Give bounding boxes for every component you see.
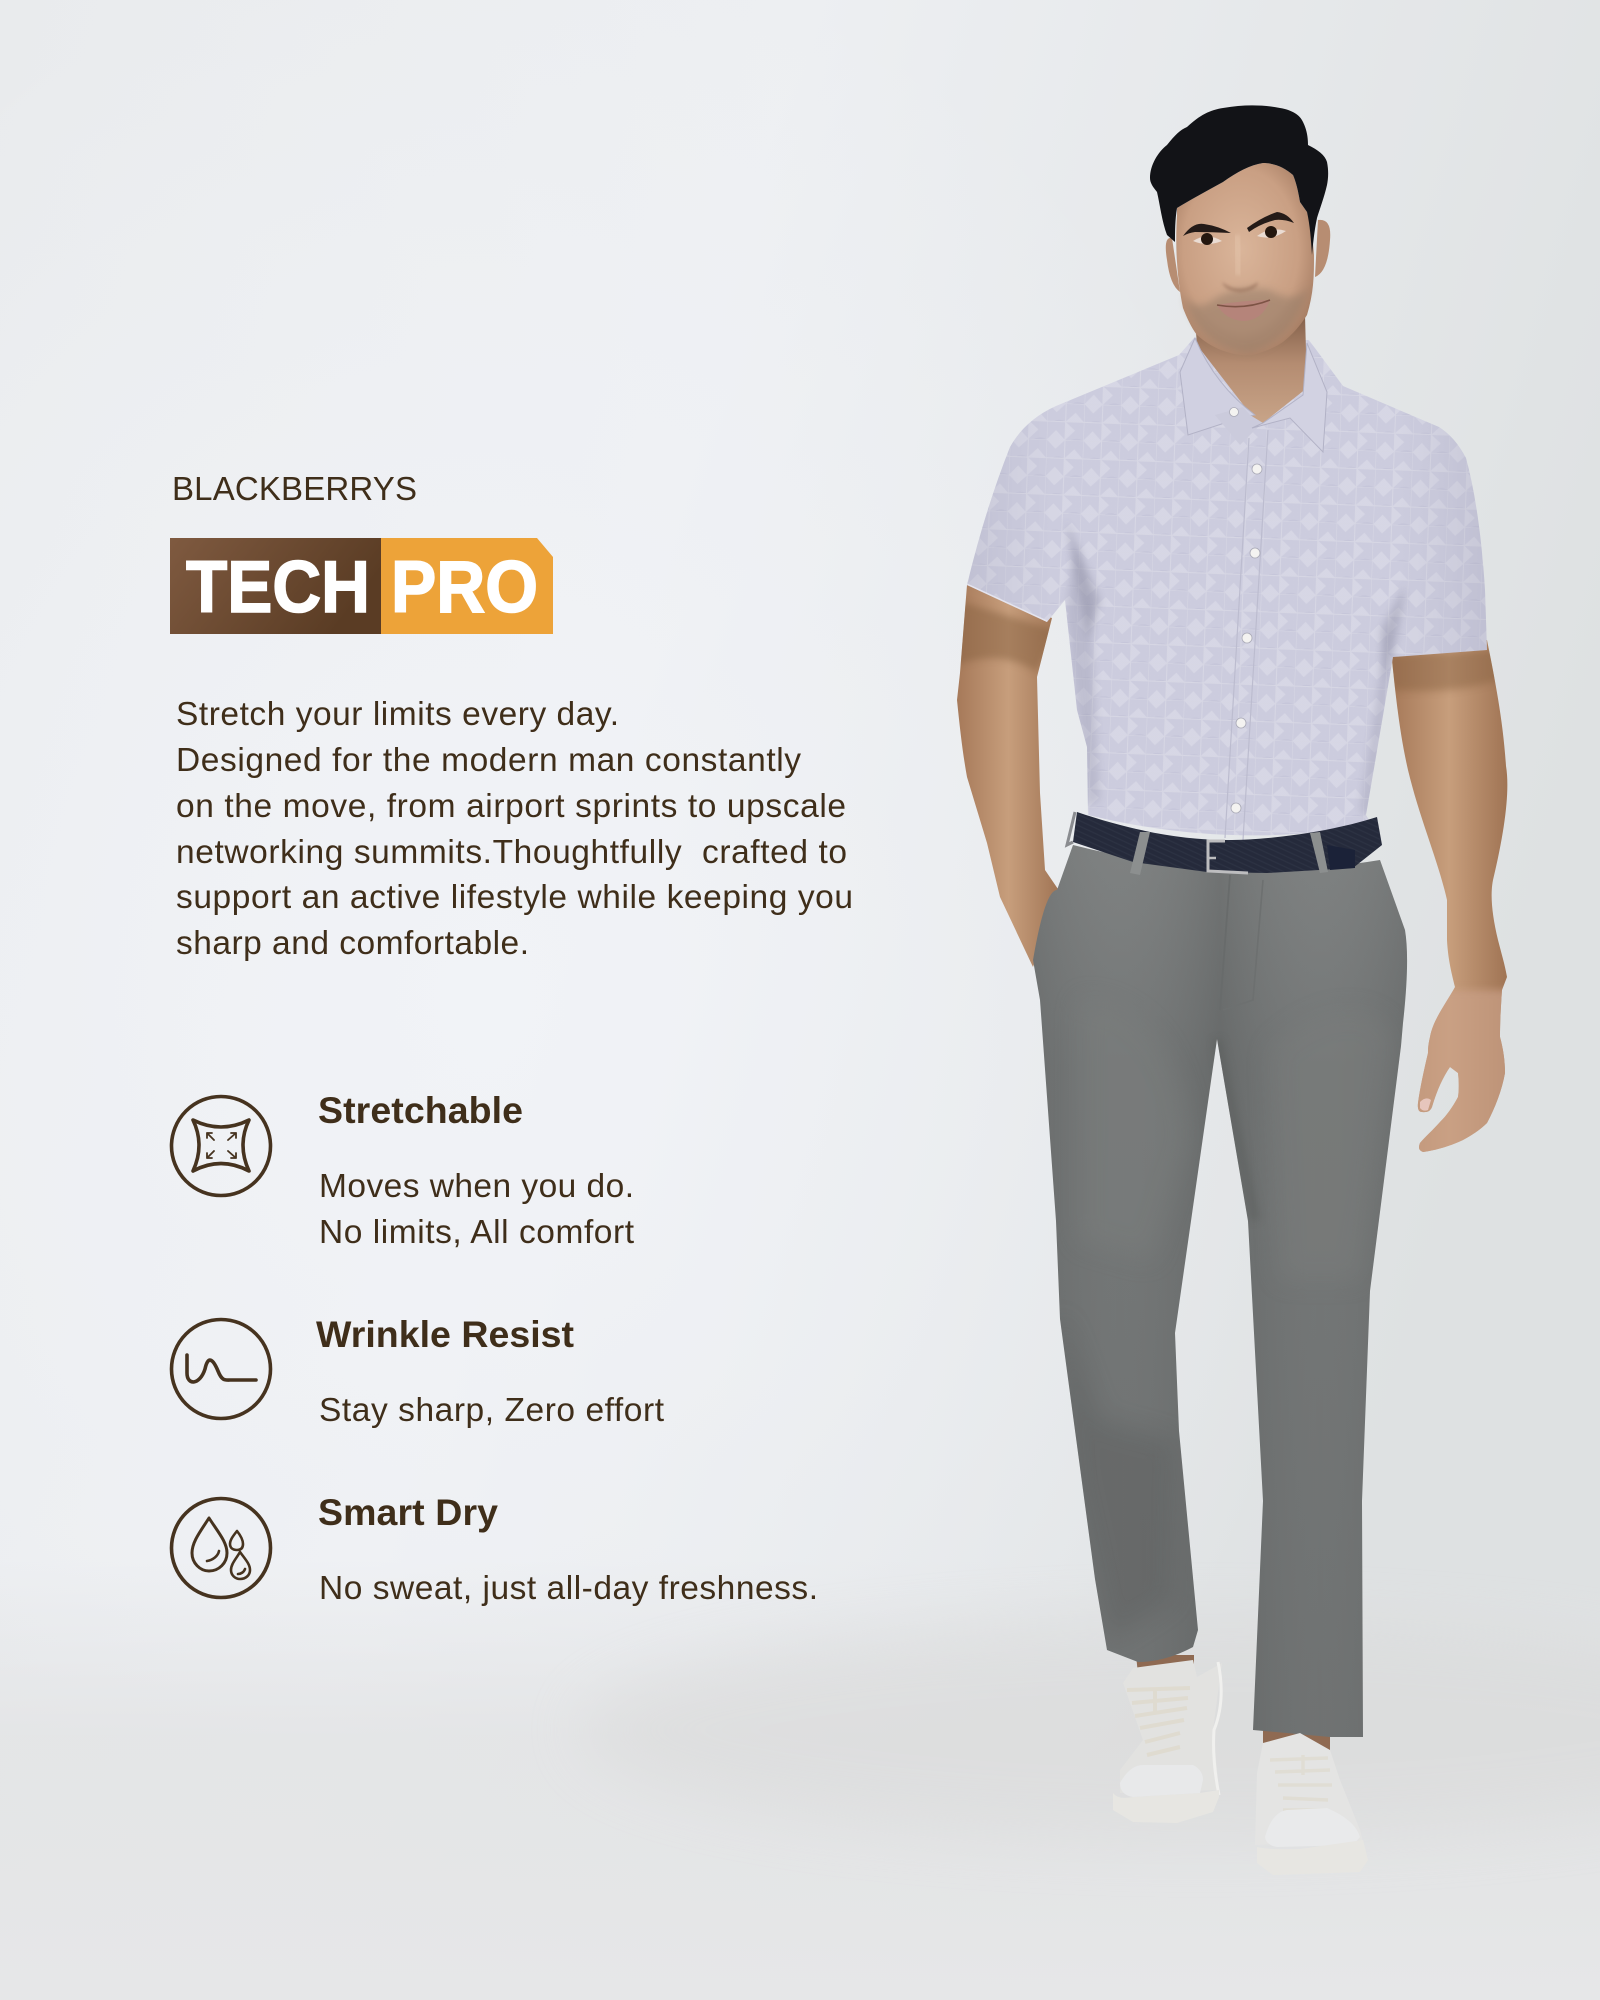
model figure [950, 105, 1520, 1875]
shirt [950, 330, 1500, 850]
logo: Tech Pro: TECH [186, 547, 370, 628]
logo: Tech Pro [170, 538, 553, 634]
right shoe [1255, 1733, 1368, 1875]
icon: smooth wave line [172, 1320, 270, 1418]
logo: Tech Pro: PRO [391, 547, 538, 628]
description paragraph: networking summits.Thoughtfully crafted to [176, 834, 847, 871]
description paragraph: Designed for the modern man constantly [176, 742, 801, 779]
feature: Wrinkle Resist [172, 1313, 665, 1429]
heading: Wrinkle Resist: Wrinkle Resist [316, 1313, 574, 1355]
description paragraph: sharp and comfortable. [176, 925, 529, 962]
text: Stretchable description [319, 1168, 635, 1251]
right arm and hand [1392, 640, 1508, 1152]
stubble shading [1184, 285, 1310, 353]
icon: water drops [172, 1498, 270, 1598]
ears [1166, 220, 1330, 292]
belt [1067, 812, 1382, 875]
ankles [1136, 1655, 1330, 1755]
facial features [1183, 212, 1294, 321]
shirt placket [1225, 430, 1268, 840]
text: Stretchable description: Moves when you do. [319, 1168, 634, 1205]
heading: Stretchable: Stretchable [318, 1089, 523, 1131]
left arm [955, 585, 1060, 967]
hair [1150, 105, 1328, 255]
trousers [1020, 840, 1420, 1750]
description paragraph: on the move, from airport sprints to upscale [176, 788, 846, 825]
description paragraph: support an active lifestyle while keeping you [176, 879, 853, 916]
neck [1195, 315, 1307, 423]
feature: Stretchable [172, 1089, 635, 1251]
feature: Smart Dry [172, 1491, 818, 1607]
text: Wrinkle Resist description: Stay sharp, Zero effort [319, 1392, 665, 1429]
shirt collar [1180, 338, 1327, 452]
icon: stretch pillow [172, 1096, 270, 1196]
brand name: BLACKBERRYS [172, 470, 417, 507]
text: Smart Dry description: No sweat, just all-day freshness. [319, 1570, 818, 1607]
shirt buttons [1230, 408, 1262, 813]
description paragraph [176, 696, 853, 962]
description paragraph: Stretch your limits every day. [176, 696, 619, 733]
left shoe [1113, 1660, 1222, 1823]
text: Stretchable description: No limits, All comfort [319, 1214, 635, 1251]
face [1176, 163, 1314, 355]
heading: Smart Dry: Smart Dry [318, 1491, 498, 1533]
